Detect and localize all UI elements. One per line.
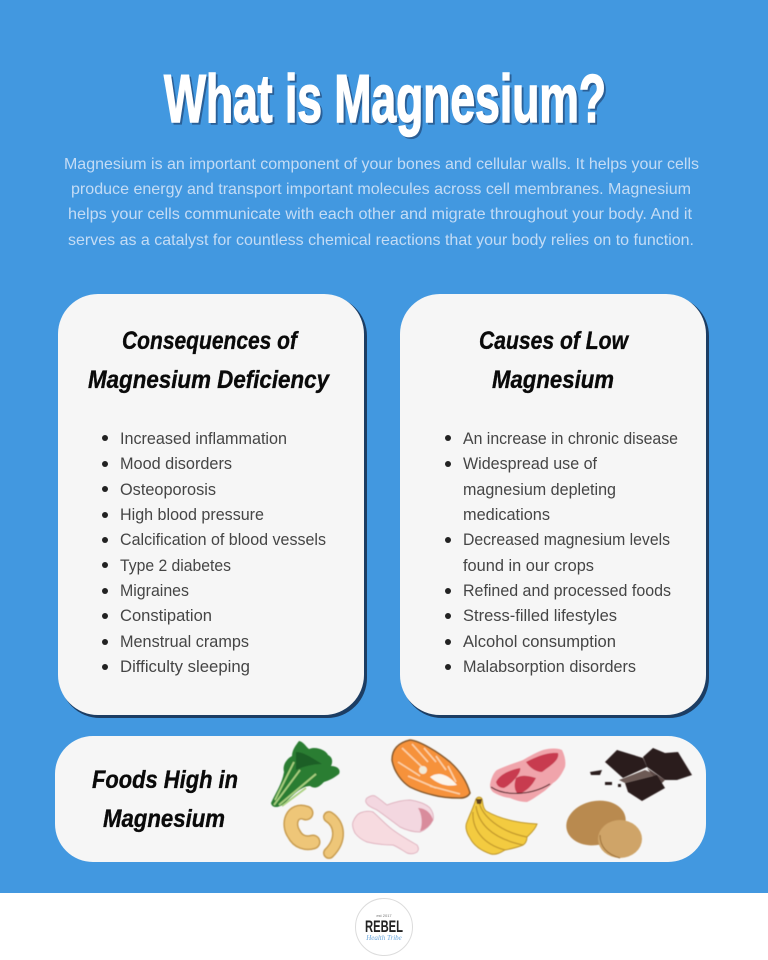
list: consequences: Increased inflammation [120,429,287,448]
list: consequences: Migraines [120,581,189,600]
list: consequences: Type 2 diabetes [120,556,231,575]
logo: rebel health [356,898,412,956]
list: consequences: Calcification of blood vessels [120,530,326,549]
list: consequences [102,429,326,676]
list: causes: magnesium depleting [463,480,616,499]
list: causes: Malabsorption disorders [463,657,636,676]
panel: consequences of magnesium deficiency [58,294,367,718]
heading: consequences: Consequences of [122,327,299,355]
intro paragraph [64,156,699,249]
icon: bananas [466,797,537,854]
heading: foods: Foods High in [92,766,238,794]
icon: spinach [271,741,340,807]
list: causes: Alcohol consumption [463,632,616,651]
list: causes: Widespread use of [463,454,597,473]
footer band [0,893,768,960]
list: causes: An increase in chronic disease [463,429,678,448]
icon: dark chocolate [590,748,692,801]
icon: chicken drumsticks [353,796,433,854]
logo: rebel health: est 2017 [376,913,392,918]
heading: consequences: Magnesium Deficiency [88,366,330,394]
heading: consequences [88,327,330,394]
list: consequences: High blood pressure [120,505,264,524]
icon: cashews [291,812,338,853]
list: causes: Stress-filled lifestyles [463,606,617,625]
icon: steak [490,748,565,802]
logo: rebel health: REBEL [365,917,403,936]
intro paragraph: helps your cells communicate with each other and migrate throughout your body. And it [68,206,693,223]
panel: causes of low magnesium [400,294,709,718]
list: consequences: Menstrual cramps [120,632,249,651]
heading: foods: Magnesium [103,805,225,833]
list: causes: Refined and processed foods [463,581,671,600]
heading: causes: Magnesium [492,366,614,394]
list: consequences: Constipation [120,606,212,625]
logo: rebel health: Health Tribe [365,934,402,942]
intro paragraph: produce energy and transport important molecules across cell membranes. Magnesium [71,181,691,198]
list: causes: medications [463,505,550,524]
list: consequences: Mood disorders [120,454,232,473]
heading: causes [479,327,629,394]
intro paragraph: Magnesium is an important component of your bones and cellular walls. It helps your cells [64,156,699,173]
list: causes: found in our crops [463,556,594,575]
intro paragraph: serves as a catalyst for countless chemical reactions that your body relies on to function. [68,232,694,249]
list: consequences: Osteoporosis [120,480,216,499]
list: causes [445,429,678,676]
heading: causes: Causes of Low [479,327,629,355]
list: causes: Decreased magnesium levels [463,530,670,549]
heading: foods [92,766,238,833]
icon: salmon [392,740,470,798]
icon: potatoes [562,795,642,858]
list: consequences: Difficulty sleeping [120,657,250,676]
panel: foods high in magnesium [55,736,706,862]
